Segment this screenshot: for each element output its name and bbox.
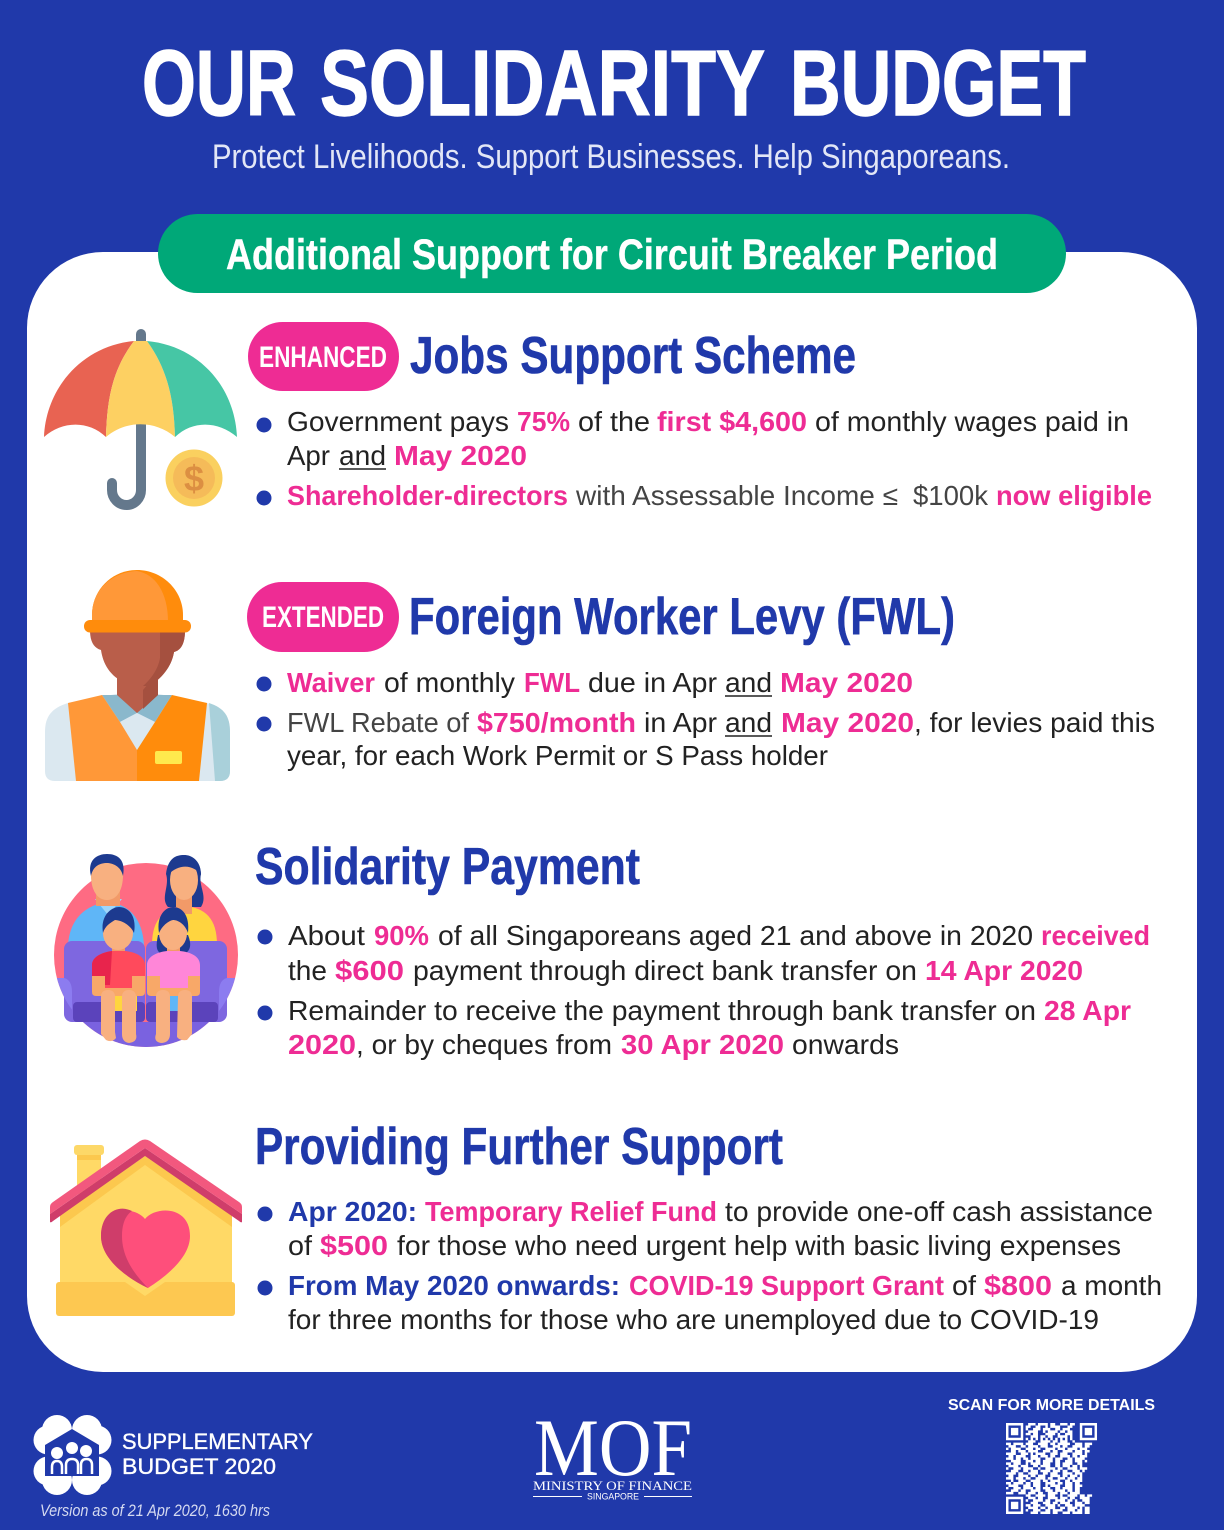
banner: additional support: Additional Support for Circuit Breaker Period [226,231,998,279]
bullet: fwl rebate [256,707,1155,771]
bullet: temporary relief fund: $500 [320,1230,388,1261]
icon: construction worker [45,570,230,781]
bullet: waiver: and [725,667,772,698]
bullet: temporary relief fund: of [288,1230,312,1261]
bullet: about 90 percent: $600 [335,955,404,986]
icon: house with heart [50,1140,242,1316]
footer: scan prompt: SCAN FOR MORE DETAILS [948,1397,1155,1414]
footer: ministry of finance logo: SINGAPORE [587,1492,639,1502]
bullet: remainder: 2020 [288,1029,356,1060]
bullet: remainder: 30 Apr 2020 [621,1029,784,1060]
panel: solidarity payment [40,838,1150,1060]
footer: qr code [1006,1423,1097,1514]
bullet: temporary relief fund: Temporary Relief Fund [425,1196,717,1227]
bullet: about 90 percent [258,920,1150,986]
bullet: shareholder-directors: $100k [913,480,988,511]
panel: jobs support scheme [44,322,1152,511]
heading: foreign worker levy: Foreign Worker Levy (FWL) [409,588,955,646]
bullet: covid-19 support grant: $800 [984,1270,1052,1301]
bullet: about 90 percent: payment through direct bank transfer on [413,955,917,986]
bullet: waiver: Waiver [287,667,375,698]
bullet: government pays: May 2020 [394,440,527,471]
banner: additional support [158,214,1066,293]
bullet: covid-19 support grant: From May 2020 onwards: [288,1270,620,1301]
bullet: fwl rebate: FWL Rebate of [287,707,469,738]
bullet: waiver: FWL [524,667,580,698]
bullet: government pays: Government pays [287,406,509,437]
bullet: shareholder-directors: with Assessable Income ≤ [575,480,898,511]
version note: Version as of 21 Apr 2020, 1630 hrs [40,1501,270,1520]
icon: umbrella with coin: $ [184,458,204,499]
bullet: shareholder-directors: Shareholder-directors [287,480,568,511]
bullet: government pays [256,406,1129,471]
bullet: temporary relief fund [258,1196,1153,1261]
footer: supplementary budget logo [34,1415,313,1495]
subtitle: Protect Livelihoods. Support Businesses. Help Singaporeans. [212,138,1010,176]
title [142,31,1086,135]
bullet: waiver: of monthly [384,667,515,698]
bullet: remainder: , or by cheques from [356,1029,612,1060]
icon: umbrella with coin [44,334,237,506]
text: supplementary budget 2020 [122,1429,313,1479]
text: supplementary budget 2020: SUPPLEMENTARY [122,1429,313,1454]
bullet: government pays: first $4,600 [657,406,807,437]
heading: providing further support: Providing Further Support [255,1118,783,1176]
panel: foreign worker levy [45,570,1155,781]
bullet: shareholder-directors: now eligible [996,480,1152,511]
bullet: temporary relief fund: for those who need urgent help with basic living expenses [397,1230,1121,1261]
bullet: about 90 percent: 90% [374,920,429,951]
panel: providing further support [50,1118,1162,1335]
footer: ministry of finance logo: MOF [534,1402,692,1493]
bullet: government pays: of the [578,406,650,437]
bullet: fwl rebate: year, for each Work Permit or S Pass holder [287,740,828,771]
bullet: government pays: of monthly wages paid in [815,406,1129,437]
bullet: remainder: Remainder to receive the payment through bank transfer on [288,995,1036,1026]
bullet: covid-19 support grant: of [952,1270,976,1301]
panel: white content card [27,252,1197,1372]
bullet: about 90 percent: the [288,955,327,986]
title: BUDGET [790,31,1086,135]
bullet: government pays: Apr [287,440,330,471]
heading: solidarity payment: Solidarity Payment [255,838,640,896]
bullet: shareholder-directors [256,480,1152,511]
badge: enhanced [248,322,399,391]
bullet: about 90 percent: received [1041,920,1150,951]
title: SOLIDARITY [320,31,765,135]
bullet: fwl rebate: May 2020 [781,707,914,738]
badge: enhanced: ENHANCED [259,341,387,374]
bullet: remainder [258,995,1131,1060]
bullet: covid-19 support grant [258,1270,1162,1335]
icon: family on sofa [54,854,238,1047]
bullet: fwl rebate: in Apr [644,707,717,738]
bullet: remainder: 28 Apr [1044,995,1131,1026]
bullet: fwl rebate: and [725,707,772,738]
title: OUR [142,31,296,135]
bullet: government pays: and [339,440,386,471]
bullet: fwl rebate: , for levies paid this [914,707,1155,738]
footer: ministry of finance logo: MINISTRY OF FINANCE [533,1478,692,1493]
heading: jobs support scheme: Jobs Support Scheme [410,327,856,385]
text: supplementary budget 2020: BUDGET 2020 [122,1454,276,1479]
bullet: temporary relief fund: to provide one-off cash assistance [725,1196,1153,1227]
bullet: about 90 percent: About [288,920,365,951]
bullet: waiver [256,667,913,698]
badge: extended: EXTENDED [262,601,384,634]
bullet: waiver: due in Apr [588,667,717,698]
bullet: about 90 percent: 14 Apr 2020 [925,955,1083,986]
bullet: covid-19 support grant: for three months for those who are unemployed due to COVID-19 [288,1304,1099,1335]
bullet: about 90 percent: of all Singaporeans aged 21 and above in 2020 [438,920,1033,951]
bullet: remainder: onwards [792,1029,899,1060]
bullet: waiver: May 2020 [780,667,913,698]
badge: extended [247,582,399,652]
bullet: fwl rebate: $750/month [477,707,636,738]
bullet: covid-19 support grant: a month [1061,1270,1162,1301]
bullet: covid-19 support grant: COVID-19 Support Grant [629,1270,944,1301]
bullet: temporary relief fund: Apr 2020: [288,1196,417,1227]
icon: family flower logo [34,1415,112,1495]
bullet: government pays: 75% [517,406,570,437]
